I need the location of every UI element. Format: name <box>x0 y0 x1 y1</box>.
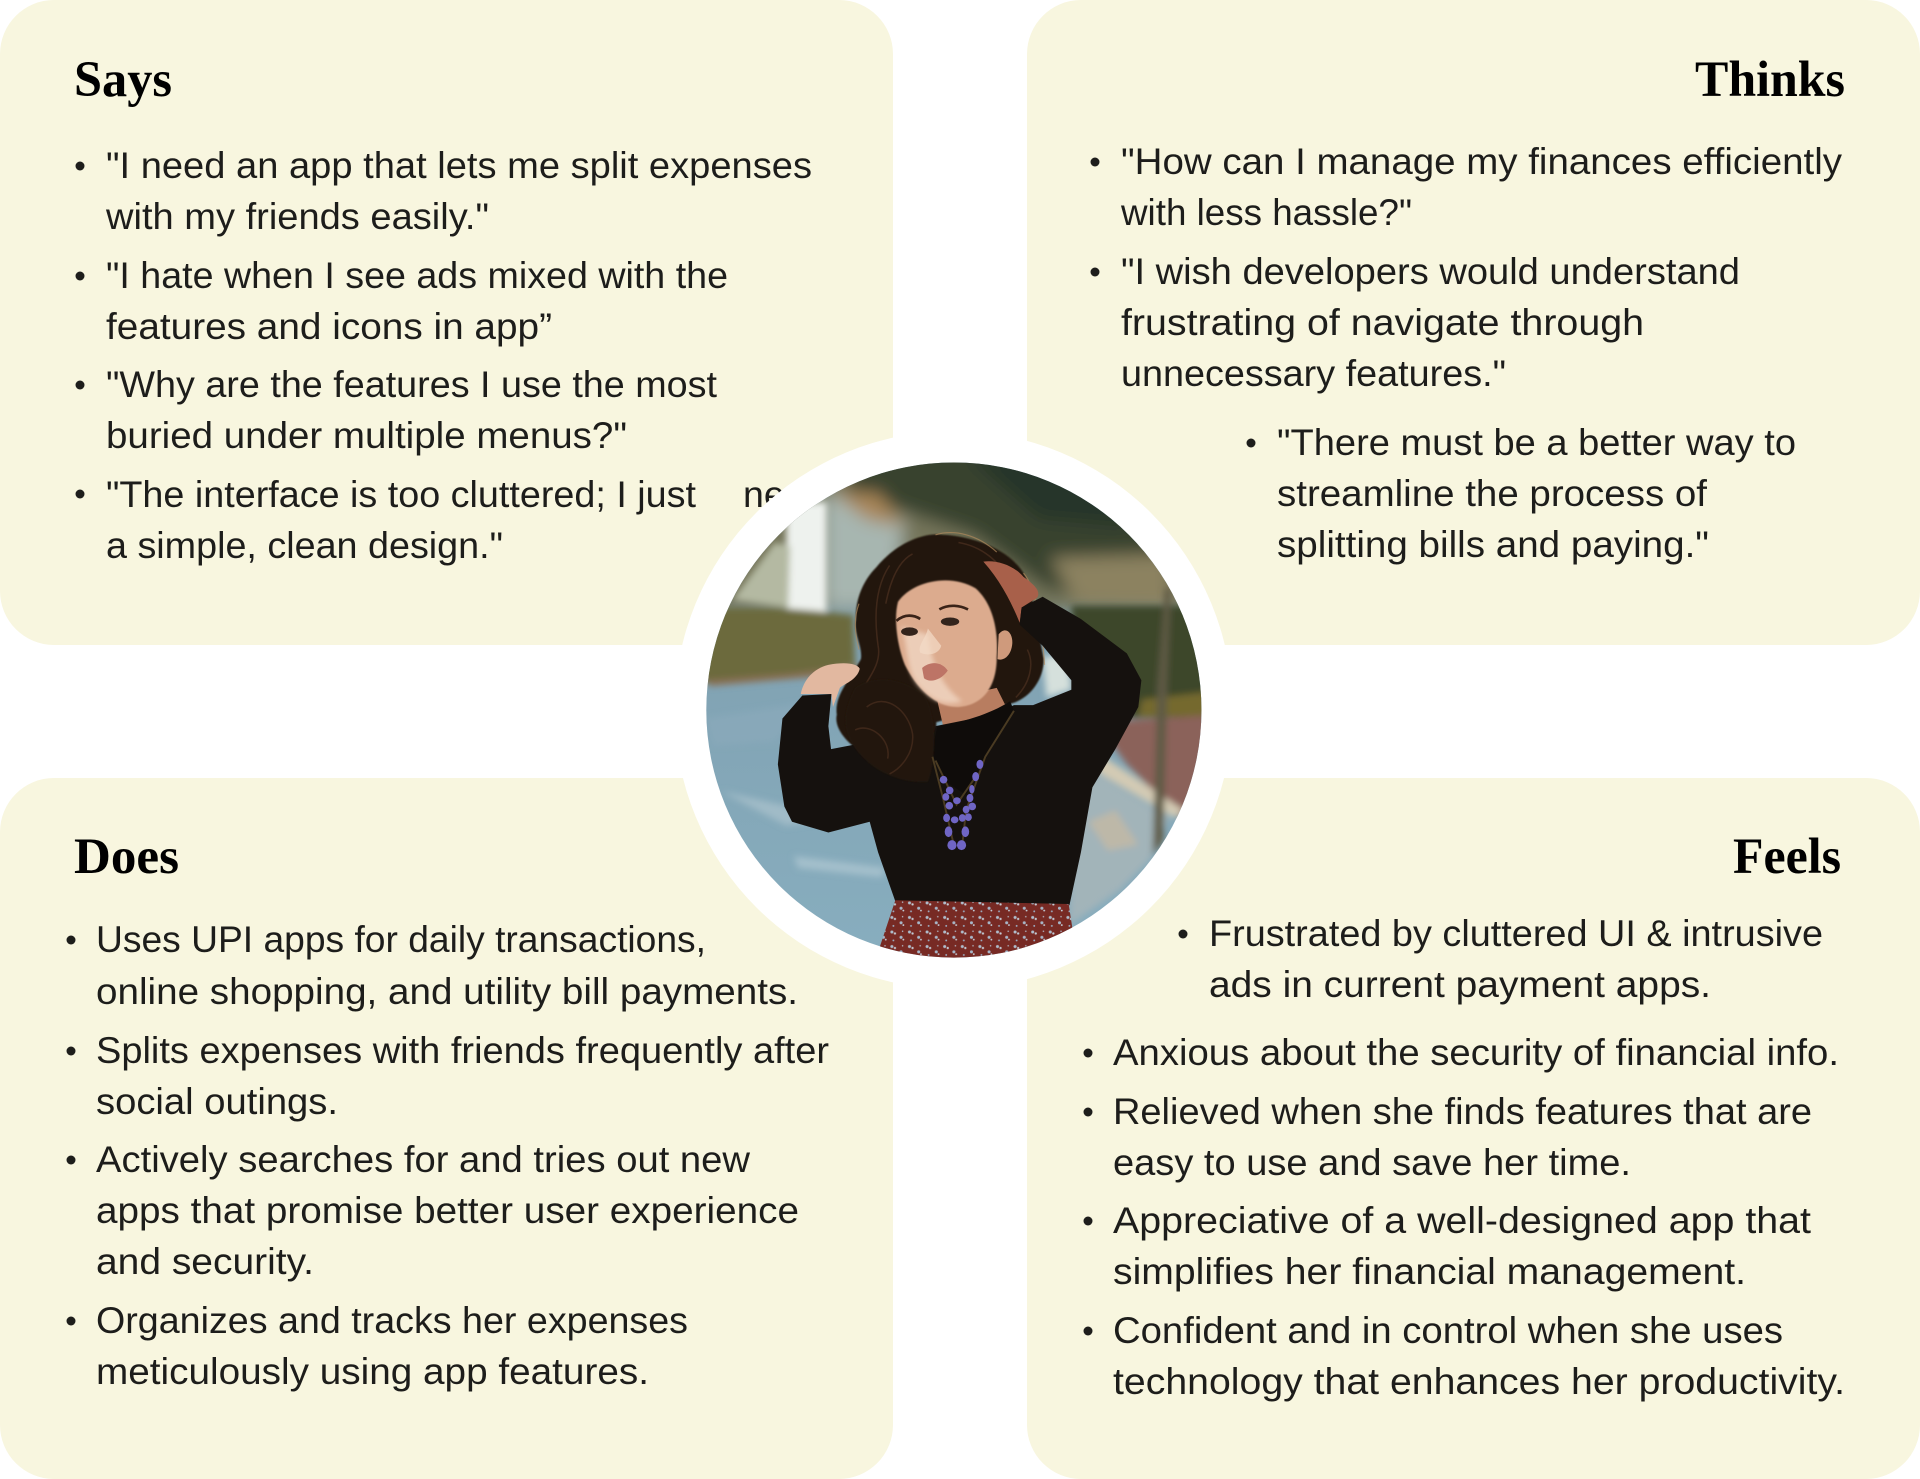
list item: splits expenses: social outings. <box>96 1080 338 1122</box>
list item: tracks expenses: Organizes and tracks her expenses <box>96 1299 688 1341</box>
panel: says <box>0 0 893 645</box>
list item: ads quote <box>76 254 728 347</box>
list item: split expenses quote: "I need an app that lets me split expenses <box>106 144 812 186</box>
panel: does <box>0 778 893 1479</box>
list item: frustrated <box>1178 912 1823 1005</box>
list item: frustrated: Frustrated by cluttered UI & intrusive <box>1209 912 1823 954</box>
heading: Thinks: Thinks <box>1695 52 1845 108</box>
heading: Does: Does <box>74 829 179 885</box>
list item: developers quote: frustrating of navigate through <box>1121 301 1644 343</box>
list item: splits expenses <box>66 1029 829 1122</box>
list item: manage finances quote: "How can I manage my finances efficiently <box>1121 140 1842 182</box>
heading: Feels: Feels <box>1733 829 1841 885</box>
list item: cluttered interface quote <box>76 473 785 566</box>
list item: developers quote: unnecessary features." <box>1121 352 1506 394</box>
list item: manage finances quote <box>1090 140 1842 233</box>
list item: developers quote <box>1090 250 1740 394</box>
list item: UPI apps: Uses UPI apps for daily transactions, <box>96 918 706 960</box>
woman: black sweater <box>778 597 1141 905</box>
list item: tries new apps: apps that promise better user experience <box>96 1189 799 1231</box>
list item: relieved <box>1084 1090 1812 1183</box>
photo background: street and foliage <box>706 462 1202 958</box>
woman: skirt with floral print <box>880 900 1072 958</box>
woman: beaded necklace <box>932 711 1014 850</box>
list item: better way quote: streamline the process of <box>1277 472 1708 514</box>
list item: anxious: Anxious about the security of financial info. <box>1113 1031 1839 1073</box>
list item: better way quote: splitting bills and paying." <box>1277 523 1709 565</box>
list item: relieved: easy to use and save her time. <box>1113 1141 1631 1183</box>
list item: appreciative: simplifies her financial management. <box>1113 1250 1746 1292</box>
list item: confident: technology that enhances her productivity. <box>1113 1360 1845 1402</box>
list item: ads quote: features and icons in app” <box>106 305 552 347</box>
list item: tries new apps <box>66 1138 799 1282</box>
list item: tries new apps: and security. <box>96 1240 314 1282</box>
woman: hair <box>835 532 1046 746</box>
woman: hand in hair <box>801 663 860 707</box>
list item: cluttered interface quote: a simple, clean design." <box>106 524 503 566</box>
heading: Says: Says <box>74 52 172 108</box>
list item: appreciative <box>1084 1199 1812 1292</box>
list item: split expenses quote: with my friends easily." <box>105 195 489 237</box>
list item: appreciative: Appreciative of a well-designed app that <box>1113 1199 1812 1241</box>
woman: neck <box>937 688 1008 726</box>
white ring behind portrait <box>674 431 1232 989</box>
portrait photo of woman <box>706 462 1202 958</box>
panel: thinks <box>1027 0 1920 645</box>
list item: better way quote <box>1246 421 1796 565</box>
woman: raised hand on head <box>983 561 1038 623</box>
list item: buried features quote: "Why are the features I use the most <box>106 363 718 405</box>
list item: split expenses quote <box>76 144 812 237</box>
panel: feels <box>1027 778 1920 1479</box>
list item: tracks expenses <box>66 1299 688 1392</box>
list item: buried features quote: buried under multiple menus?" <box>106 414 627 456</box>
list item: developers quote: "I wish developers would understand <box>1121 250 1740 292</box>
list item: relieved: Relieved when she finds features that are <box>1113 1090 1812 1132</box>
list item: UPI apps: online shopping, and utility bill payments. <box>96 970 798 1012</box>
list item: confident: Confident and in control when she uses <box>1113 1309 1783 1351</box>
woman: turtleneck <box>962 702 1012 721</box>
list item: splits expenses: Splits expenses with friends frequently after <box>96 1029 829 1071</box>
list item: buried features quote <box>76 363 718 456</box>
list item: better way quote: "There must be a better way to <box>1277 421 1796 463</box>
list item: manage finances quote: with less hassle?" <box>1120 191 1412 233</box>
list item: confident <box>1084 1309 1845 1402</box>
list item: ads quote: "I hate when I see ads mixed with the <box>106 254 728 296</box>
woman: lock of hair over shoulder <box>846 680 934 782</box>
list item: cluttered interface quote: ne <box>743 473 785 515</box>
list item: cluttered interface quote: "The interface is too cluttered; I just <box>106 473 697 515</box>
list item: UPI apps <box>66 918 798 1012</box>
list item: tracks expenses: meticulously using app features. <box>96 1350 649 1392</box>
list item: frustrated: ads in current payment apps. <box>1209 963 1711 1005</box>
woman: face <box>896 580 1012 707</box>
list item: tries new apps: Actively searches for and tries out new <box>96 1138 751 1180</box>
